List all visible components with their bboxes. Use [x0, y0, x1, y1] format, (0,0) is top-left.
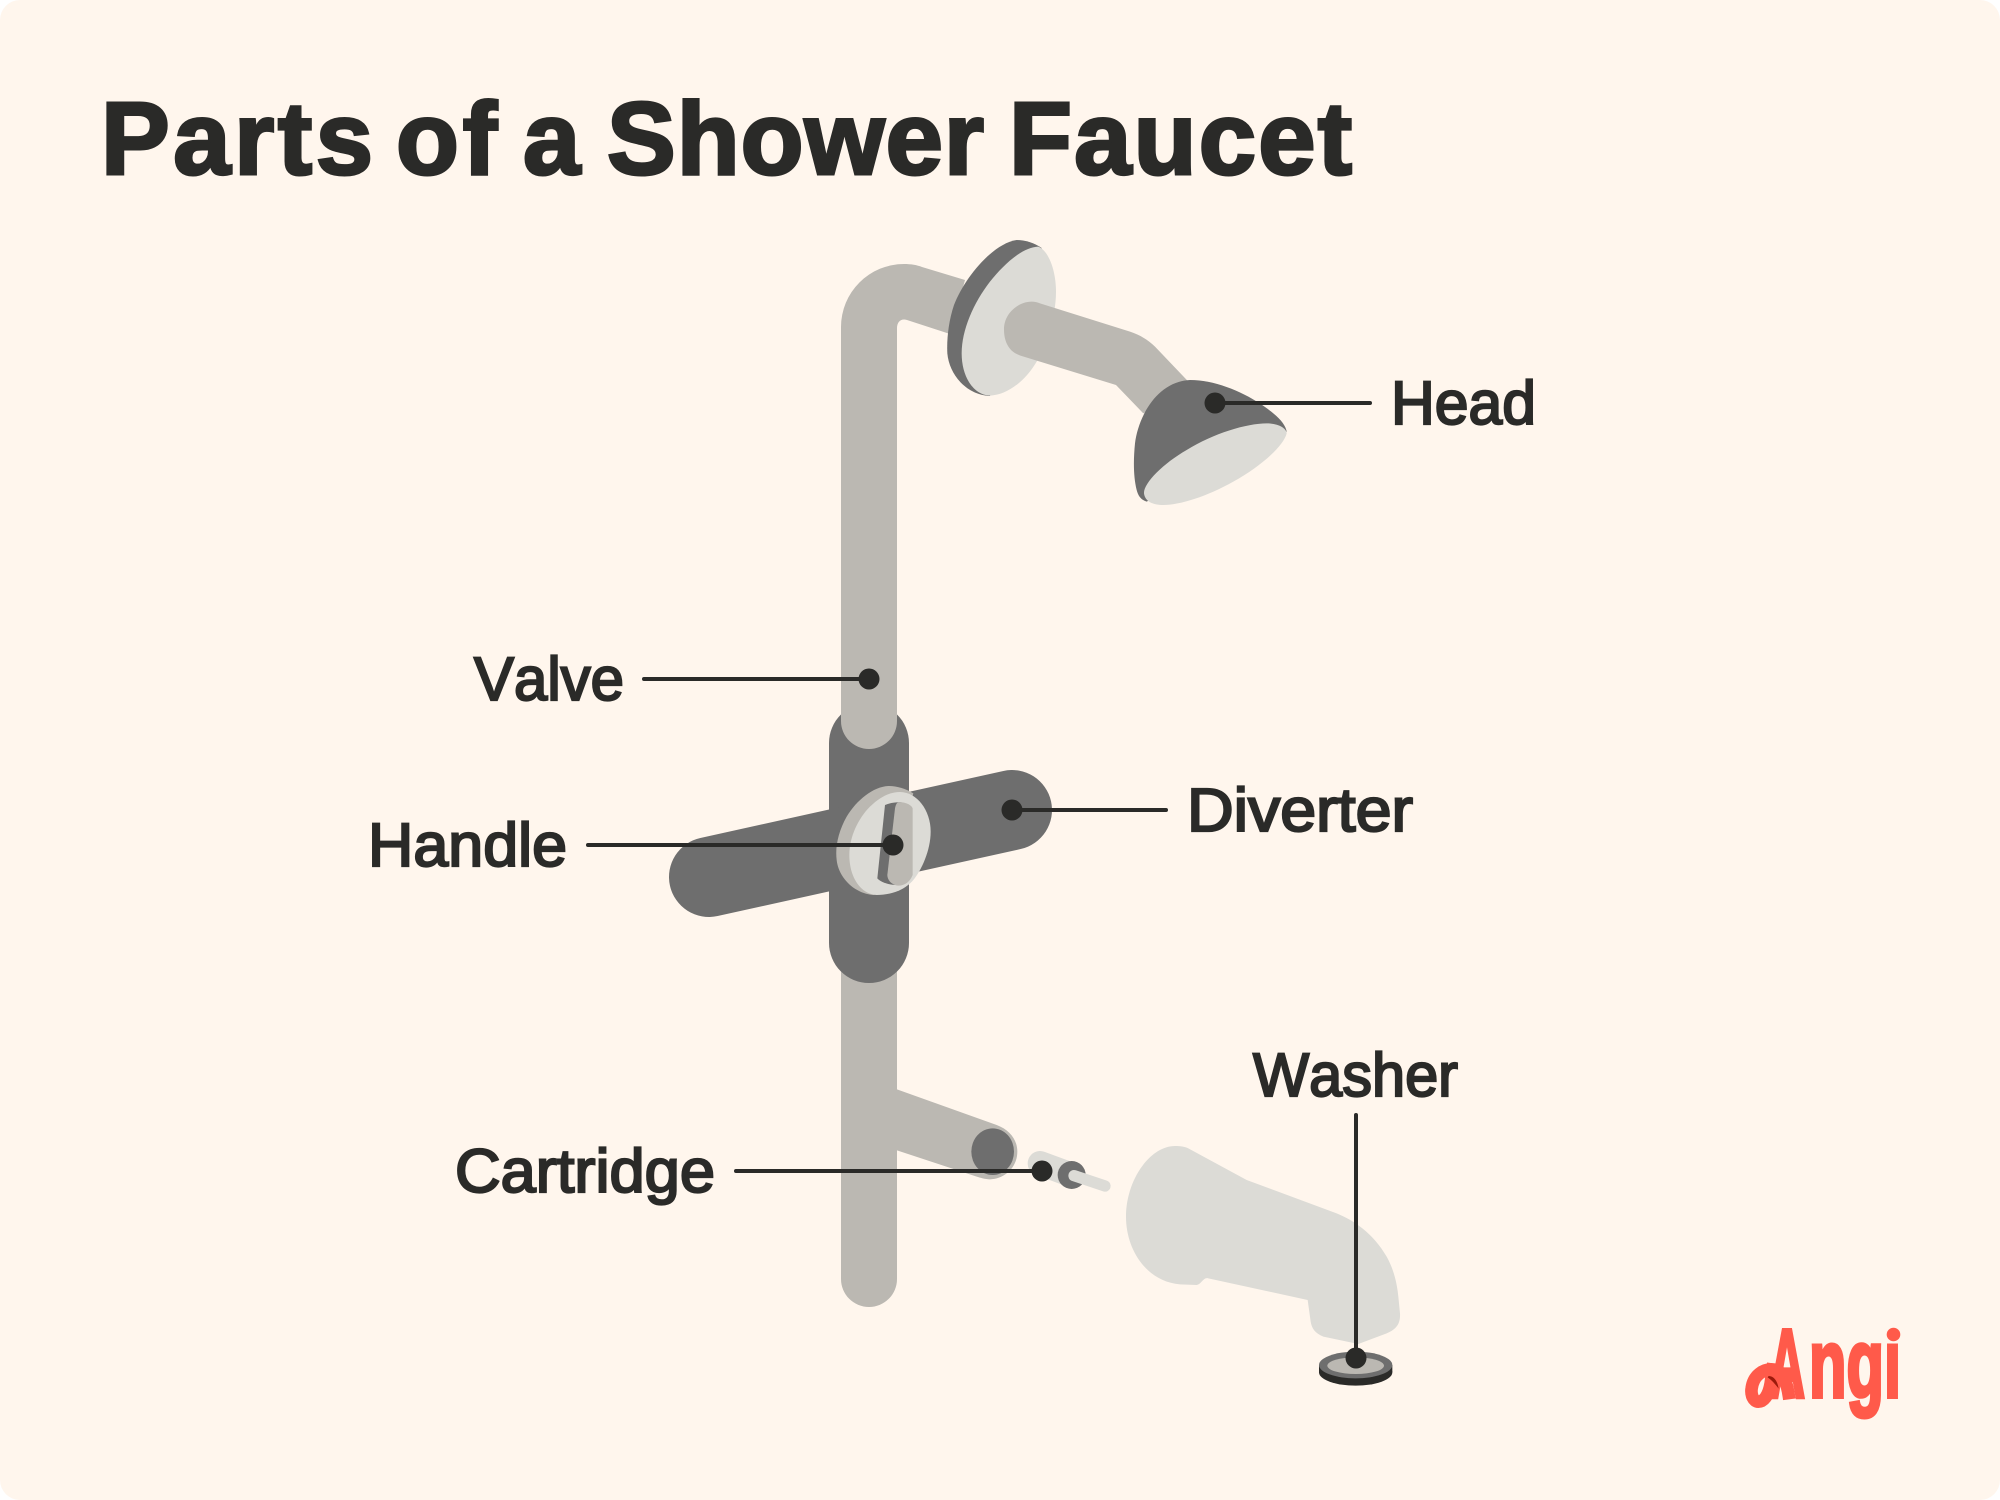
cartridge — [1040, 1161, 1105, 1189]
lower pipe — [841, 960, 897, 1307]
title: of — [396, 81, 498, 196]
upper pipe — [841, 264, 965, 749]
logo: Angi: ngi — [1809, 1309, 1901, 1418]
diverter and valve body — [709, 743, 1012, 943]
tub spout — [1126, 1146, 1400, 1344]
callout: Cartridge: Cartridge — [455, 1137, 715, 1205]
illustration: shower faucet assembly — [709, 240, 1400, 1386]
callout: Washer — [1253, 1041, 1458, 1368]
title: Shower — [607, 81, 984, 196]
title: Parts — [101, 81, 373, 196]
handle — [836, 786, 931, 895]
shower head arm and head — [1004, 302, 1287, 505]
flange — [947, 240, 1056, 396]
callout: Cartridge — [455, 1137, 1052, 1205]
callout: Valve: Valve — [474, 645, 624, 713]
title: Faucet — [1009, 81, 1352, 196]
logo: Angi — [1751, 1309, 1904, 1418]
callout: Head: Head — [1391, 369, 1536, 437]
callout: Handle: Handle — [368, 811, 567, 879]
callout: Valve — [474, 645, 880, 713]
logo: Angi: A — [1769, 1309, 1805, 1418]
washer — [1319, 1352, 1392, 1386]
title: a — [523, 81, 581, 196]
callout: Handle — [368, 811, 904, 879]
title — [101, 81, 1352, 196]
callout: Diverter — [1002, 776, 1413, 844]
callout: Head — [1204, 369, 1536, 437]
tub spout branch pipe — [897, 1089, 1017, 1179]
callout: Diverter: Diverter — [1187, 776, 1413, 844]
callout: Washer: Washer — [1253, 1041, 1458, 1109]
